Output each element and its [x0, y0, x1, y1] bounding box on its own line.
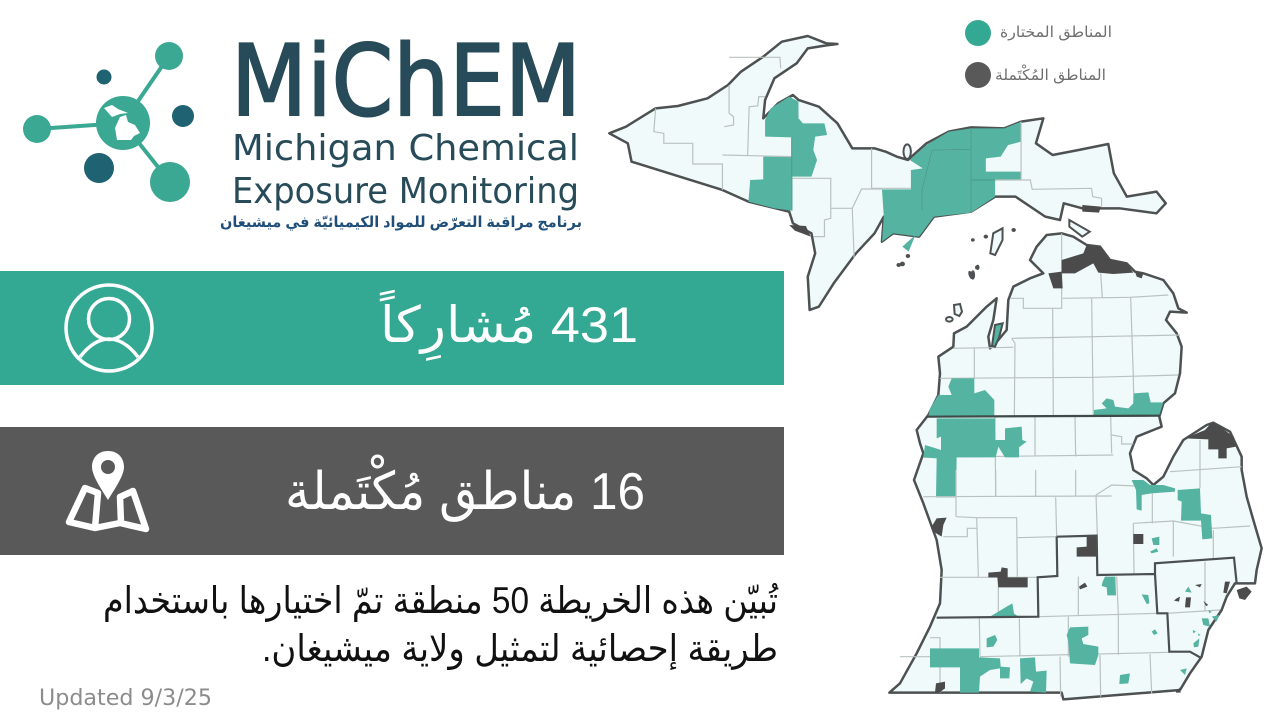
- logo text: Exposure Monitoring: Exposure Monitoring: [232, 171, 579, 212]
- banner: completed areas: [0, 427, 784, 555]
- islands: [831, 42, 1090, 280]
- completed areas: south: [932, 518, 1252, 693]
- map legend: المناطق المُكْتَملة: [995, 64, 1106, 84]
- description paragraph: طريقة إحصائية لتمثيل ولاية ميشيغان.: [262, 628, 778, 670]
- map: Lower Peninsula: [889, 233, 1262, 699]
- banner text: 16 completed areas: 16 مناطق مُكْتَملة: [285, 454, 645, 522]
- logo wordmark: MiChEM: MiChEM: [231, 25, 581, 139]
- northern county lines: [923, 233, 1242, 497]
- northern completed areas: [1048, 245, 1236, 458]
- southern county lines: [900, 470, 1250, 697]
- northwest islands: [946, 265, 1003, 347]
- map: Upper Peninsula: [609, 36, 1166, 310]
- region boundaries: [937, 536, 1237, 658]
- UP selected areas: [748, 97, 1021, 252]
- banner: participants: [0, 271, 784, 385]
- map: southern Lower Peninsula details: [900, 470, 1252, 697]
- UP completed shoreline areas: [789, 205, 1101, 237]
- logo subtitle in Arabic: برنامج مراقبة التعرّض للمواد الكيميائيّة في ميشيغان: [220, 214, 582, 231]
- updated date: Updated 9/3/25: [39, 686, 212, 711]
- logo icon: molecule with Michigan: [23, 42, 194, 202]
- map legend: [965, 20, 1112, 88]
- selected areas: south: [930, 480, 1219, 693]
- UP county lines: [654, 57, 1102, 258]
- map legend: المناطق المختارة: [1000, 24, 1112, 41]
- icon: map with pin: [69, 451, 146, 529]
- icon: person: [66, 285, 152, 371]
- banner text: 431 participants: 431 مُشارِكاً: [379, 289, 638, 361]
- dividing line: [927, 416, 1160, 417]
- selected areas: north of the line: [923, 378, 1163, 497]
- description paragraph: [103, 580, 779, 670]
- logo text: Michigan Chemical: Michigan Chemical: [232, 128, 579, 169]
- description paragraph: تُبيّن هذه الخريطة 50 منطقة تمّ اختيارها باستخدام: [103, 580, 779, 622]
